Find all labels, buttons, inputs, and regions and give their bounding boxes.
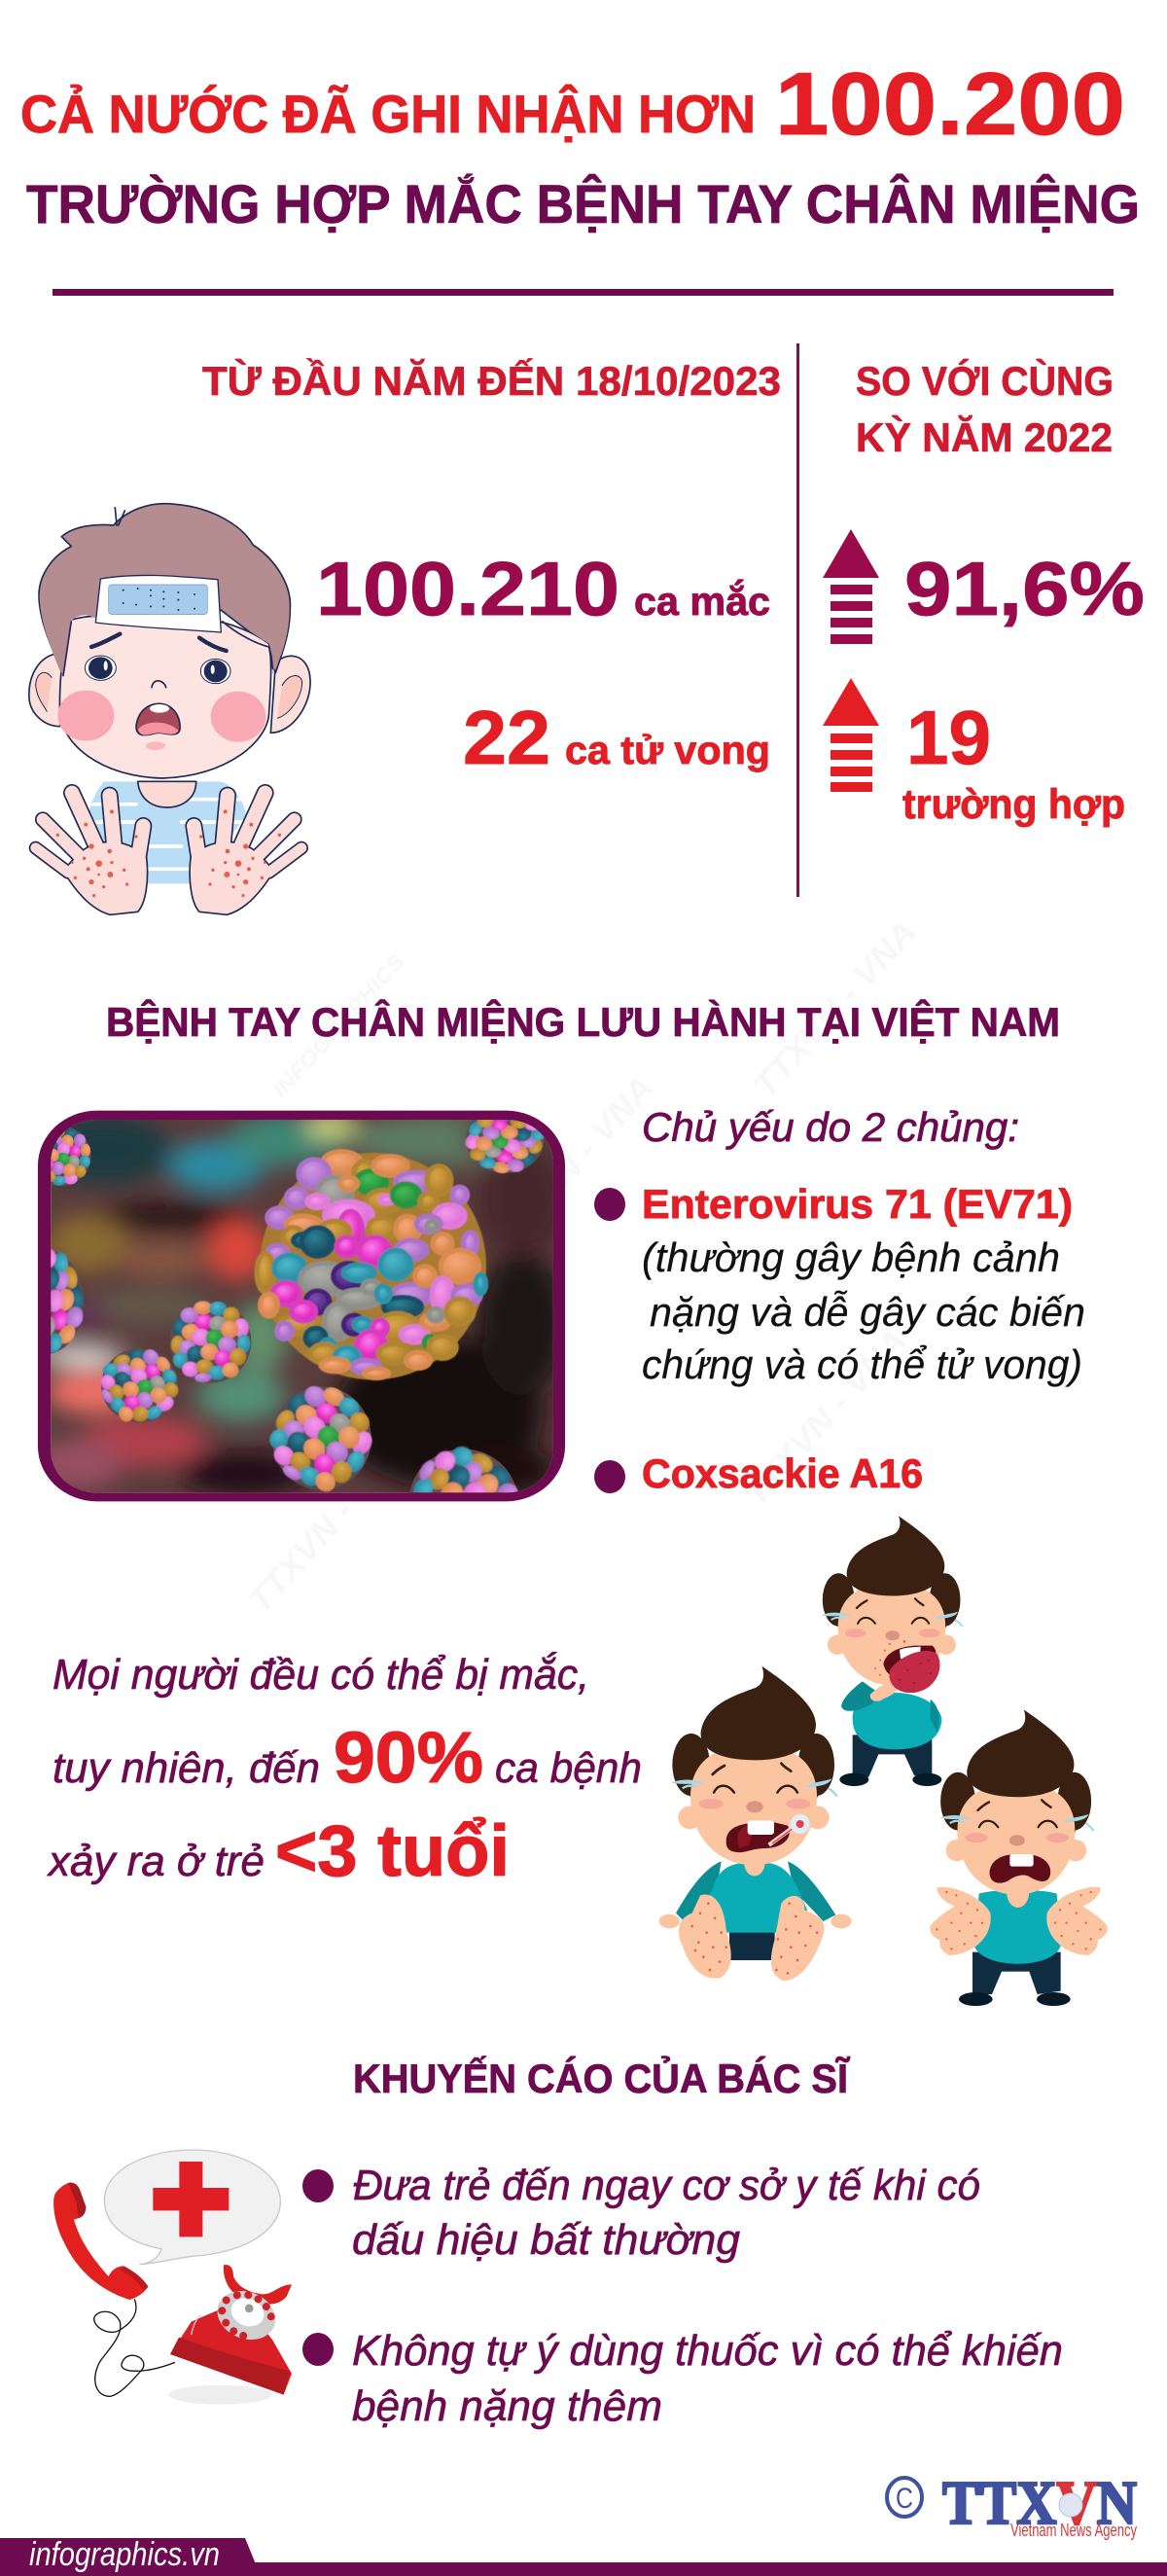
advice 1: Đưa trẻ đến ngay cơ sở y tế khi có [353, 2162, 980, 2209]
text: who gets the disease: Mọi người đều có thể bị mắc, [53, 1651, 589, 1699]
right hand with rash [190, 793, 301, 914]
watermarks: TTXVN - VNA [747, 913, 924, 1104]
title: CẢ NƯỚC ĐÃ GHI NHẬN HƠN [20, 84, 756, 144]
rotary dial [210, 2282, 283, 2348]
child's shirt [88, 776, 246, 883]
cradle [224, 2265, 292, 2305]
stat: deaths increase: 19 [906, 695, 991, 780]
virus image panel [37, 1111, 566, 1502]
stat: deaths increase: trường hợp [902, 781, 1125, 828]
child's ears [29, 654, 310, 733]
copyright logo: C [896, 2483, 913, 2515]
child's face [59, 615, 271, 778]
stat: cases [316, 546, 770, 631]
advice 2: Không tự ý dùng thuốc vì có thể khiến [352, 2327, 1063, 2375]
arrow up: deaths [823, 678, 879, 792]
strain: Coxsackie A16: Coxsackie A16 [642, 1450, 923, 1496]
mirrored hand [1048, 1888, 1106, 1953]
stat: deaths: ca tử vong [565, 728, 770, 772]
stat: cases increase: 91,6% [904, 546, 1145, 631]
bullet: advice 2 [302, 2333, 334, 2366]
left hand with rash [36, 793, 148, 914]
watermarks: TTXVN - VNA [737, 1322, 914, 1513]
advice 2 [352, 2327, 1063, 2430]
heading: circulation in Vietnam: BỆNH TAY CHÂN MIỆNG LƯU HÀNH TẠI VIỆT NAM [106, 998, 1060, 1045]
stat: cases: 100.210 [316, 546, 619, 631]
heading: doctors' recommendations: KHUYẾN CÁO CỦA BÁC SĨ [353, 2055, 850, 2101]
footer bar: infographics.vn [29, 2536, 220, 2573]
watermarks [241, 913, 924, 1620]
fever patch [95, 575, 221, 632]
stat: 90%: 90% [334, 1717, 483, 1798]
comparison heading: KỲ NĂM 2022 [856, 414, 1113, 460]
child's hair tuft [115, 508, 124, 525]
EV71 description [642, 1234, 1085, 1387]
copyright logo: TTXVN [942, 2468, 1137, 2537]
arrow up: cases [823, 529, 879, 644]
strain: EV71: Enterovirus 71 (EV71) [642, 1181, 1073, 1227]
advice 2: bệnh nặng thêm [352, 2382, 662, 2430]
blurred background colours [33, 1111, 568, 1496]
stat: deaths increase [902, 695, 1125, 828]
bullet: EV71 [594, 1188, 625, 1221]
red cross [153, 2162, 229, 2236]
stat: deaths: 22 [463, 695, 550, 780]
text: who gets the disease: ca bệnh [495, 1744, 642, 1792]
illustration: sick child with hand rash [29, 504, 310, 914]
advice 1 [352, 2162, 980, 2264]
watermarks: INFOGRAPHICS [267, 948, 409, 1102]
text: who gets the disease [47, 1651, 642, 1891]
comparison heading [856, 357, 1114, 460]
child's side hair locks [40, 574, 290, 678]
title: TRƯỜNG HỢP MẮC BỆNH TAY CHÂN MIỆNG [26, 173, 1140, 234]
watermarks: TTXVN - VNA [241, 1429, 418, 1620]
illustration: telephone and medical cross [53, 2150, 292, 2405]
bullet: advice 1 [302, 2169, 334, 2202]
speech bubble [104, 2150, 280, 2265]
comparison heading: SO VỚI CÙNG [856, 357, 1114, 404]
title: 100.200 [775, 55, 1125, 154]
stat: deaths [463, 695, 770, 780]
EV71 description: chứng và có thể tử vong) [642, 1342, 1082, 1387]
stats period heading: TỪ ĐẦU NĂM ĐẾN 18/10/2023 [202, 357, 781, 404]
image frame [38, 1111, 565, 1501]
nose [152, 681, 166, 688]
advice 1: dấu hiệu bất thường [352, 2216, 741, 2264]
EV71 description: (thường gây bệnh cảnh [642, 1234, 1060, 1280]
handset [53, 2183, 148, 2300]
shadow [168, 2385, 272, 2405]
strains intro: Chủ yếu do 2 chủng: [642, 1104, 1019, 1150]
bullet: Coxsackie [594, 1460, 625, 1493]
illustration: child showing hands [932, 1709, 1106, 2006]
illustration: child showing tongue [822, 1516, 963, 1786]
footer bar [0, 2536, 1167, 2576]
text: who gets the disease: xảy ra ở trẻ [47, 1838, 265, 1885]
stat: cases: ca mắc [634, 579, 770, 624]
cheeks [57, 691, 265, 742]
text: who gets the disease: tuy nhiên, đến [53, 1744, 320, 1792]
eyes and brows [85, 634, 230, 684]
EV71 description: nặng và dễ gây các biến [650, 1289, 1085, 1335]
cord [94, 2299, 175, 2396]
small virus particles [0, 1097, 555, 1573]
watermarks: TTXVN - VNA [484, 1069, 661, 1260]
stat: under 3 years: <3 tuổi [275, 1810, 510, 1891]
illustration: child with thermometer [659, 1666, 852, 1981]
child's hair [39, 504, 290, 676]
mouth [136, 703, 180, 750]
phone body [170, 2310, 292, 2395]
title [20, 55, 1140, 234]
large virus particle [257, 1151, 486, 1379]
